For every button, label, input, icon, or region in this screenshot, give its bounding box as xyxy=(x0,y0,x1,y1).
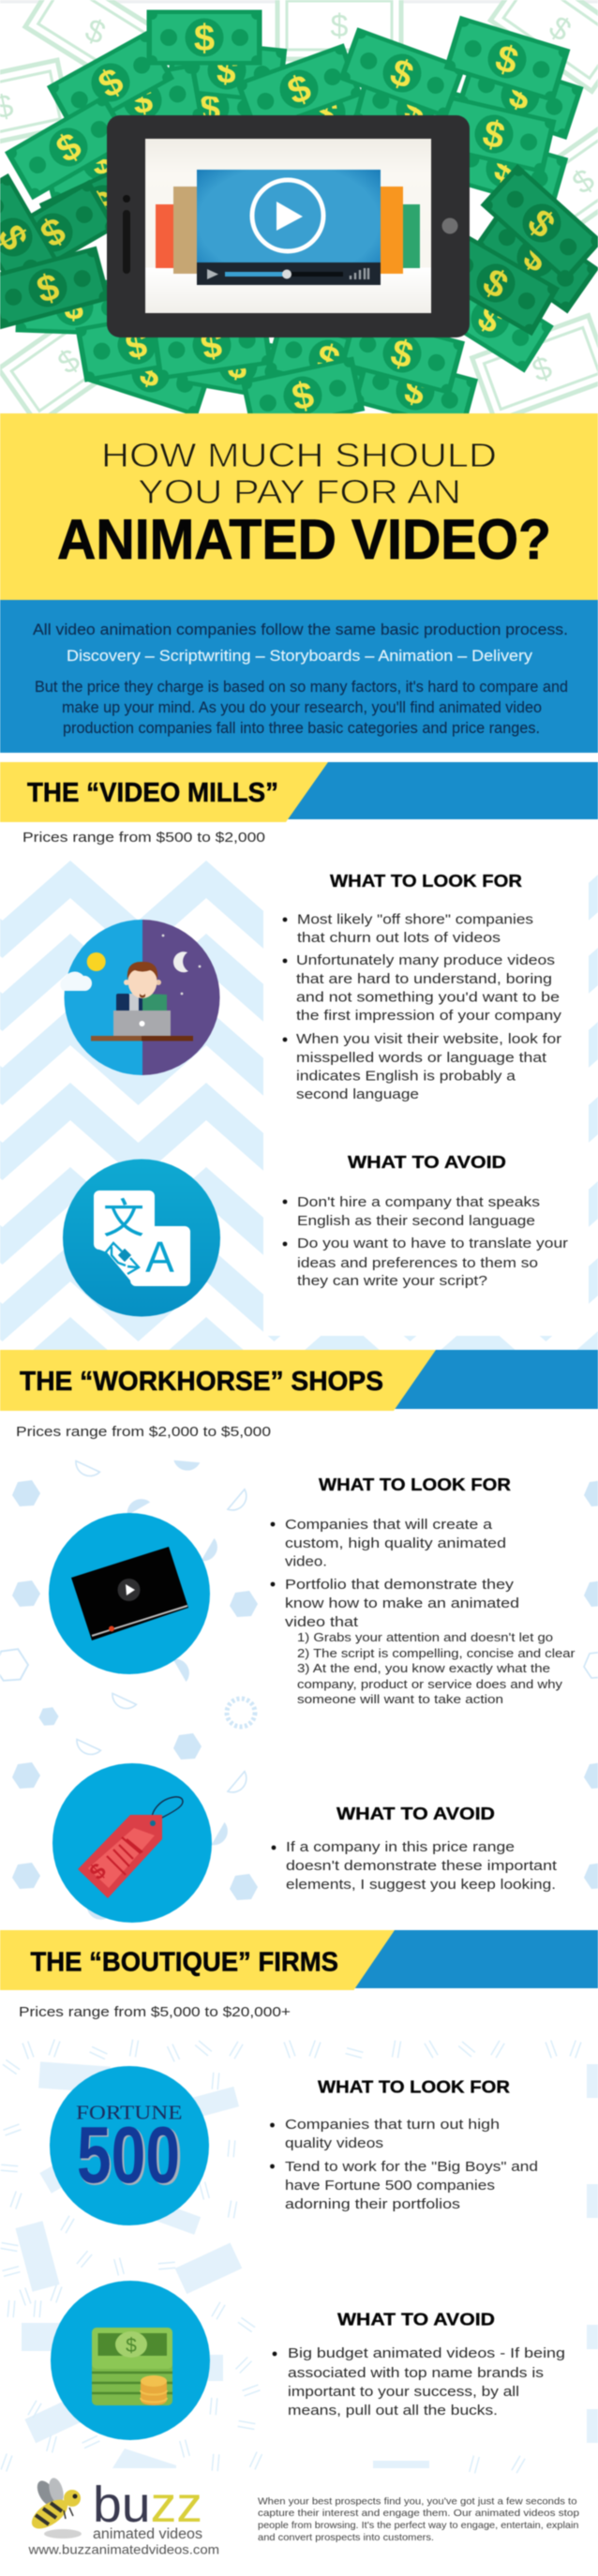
green bills behind: $ xyxy=(312,89,340,134)
what to avoid: section 1: they can write your script? xyxy=(297,1273,487,1289)
what to look for: section 2: video. xyxy=(285,1554,327,1569)
what to look for: section 1: misspelled words or language that xyxy=(296,1050,547,1066)
section 2 price range: Prices range from $2,000 to $5,000 xyxy=(16,1424,271,1440)
what to look for: section 2: video that xyxy=(285,1614,359,1630)
footer blurb: When your best prospects find you, you've got just a few seconds to xyxy=(258,2495,577,2507)
what to look for: section 2: 3) At the end, you know exactly what the xyxy=(297,1661,550,1675)
what to avoid: section 2: doesn't demonstrate these important xyxy=(286,1858,558,1874)
what to look for: section 2: know how to make an animated xyxy=(285,1595,519,1611)
green bills behind: $ xyxy=(194,18,215,59)
green bills behind: $ xyxy=(471,295,511,341)
what to avoid: section 1: ideas and preferences to them so xyxy=(297,1255,538,1271)
green bills behind: $ xyxy=(490,145,521,190)
hero illustration: tablet on pile of money xyxy=(0,0,598,435)
green bills behind: $ xyxy=(85,138,116,183)
what to look for: section 2: 1) Grabs your attention and doesn't let go xyxy=(297,1630,553,1644)
footer blurb: people from browsing. It's the perfect way to engage, entertain, explain xyxy=(258,2520,579,2531)
icon: bee xyxy=(27,2477,82,2539)
footer logo: buzz animated videos: www.buzzanimatedvideos.com xyxy=(27,2542,219,2557)
footer blurb xyxy=(258,2495,579,2543)
intro panel: production companies fall into three basic categories and price ranges. xyxy=(63,720,540,737)
section 1 chevron background xyxy=(0,853,598,1396)
green bills behind: $ xyxy=(50,125,88,171)
faded outline bills xyxy=(0,0,598,424)
green bills behind: $ xyxy=(200,88,220,129)
green bills behind: $ xyxy=(400,86,431,131)
what to look for: section 2 xyxy=(271,1475,576,1706)
section 1 header: THE “VIDEO MILLS” xyxy=(27,778,278,808)
faded outline bills: $ xyxy=(81,12,111,52)
what to look for: section 2: custom, high quality animated xyxy=(285,1535,506,1551)
icon: fortune 500: 500 xyxy=(78,2112,183,2202)
what to look for: section 1: that churn out lots of videos xyxy=(297,930,501,946)
what to look for: section 2: Companies that will create a xyxy=(285,1517,493,1533)
green bills behind: $ xyxy=(123,322,151,367)
section 3 header: THE “BOUTIQUE” FIRMS xyxy=(30,1948,338,1978)
tablet xyxy=(107,115,470,337)
green bills behind: $ xyxy=(385,51,419,97)
green bills behind: $ xyxy=(519,202,562,247)
icon: fortune 500: FORTUNE xyxy=(76,2102,182,2124)
intro panel xyxy=(0,600,598,753)
icon: translation: A xyxy=(145,1233,174,1281)
icon: translation xyxy=(63,1159,220,1316)
footer logo: buzz animated videos xyxy=(27,2477,219,2557)
intro panel: Discovery – Scriptwriting – Storyboards – Animation – Delivery xyxy=(67,648,533,665)
green bills behind: $ xyxy=(313,336,344,381)
icon: person working day and night xyxy=(60,919,221,1076)
what to look for: section 3: Companies that turn out high xyxy=(285,2117,500,2133)
green bills behind: $ xyxy=(92,60,130,107)
what to look for: section 3: adorning their portfolios xyxy=(285,2196,460,2212)
what to look for: section 3: have Fortune 500 companies xyxy=(285,2178,495,2194)
icon: price tag: $ xyxy=(84,1858,112,1885)
green bills behind: $ xyxy=(34,209,72,255)
intro panel: All video animation companies follow the same basic production process. xyxy=(33,622,568,638)
what to avoid: section 3: associated with top name brands is xyxy=(288,2365,544,2381)
what to look for: section 2: 2) The script is compelling, concise and clear xyxy=(297,1646,576,1660)
what to look for: section 3 xyxy=(270,2077,538,2212)
section 3 bars and lines background xyxy=(1,2040,598,2473)
green bills behind: $ xyxy=(224,342,252,387)
what to avoid: section 3: Big budget animated videos - If being xyxy=(288,2345,565,2361)
title band: YOU PAY FOR AN xyxy=(138,472,461,511)
green bills behind: $ xyxy=(516,234,557,280)
icon: video player xyxy=(49,1513,210,1674)
what to avoid: section 2: WHAT TO AVOID xyxy=(336,1805,495,1823)
icon: price tag xyxy=(52,1763,212,1923)
title band: HOW MUCH SHOULD xyxy=(101,436,497,474)
what to avoid: section 1 xyxy=(283,1153,568,1289)
what to look for: section 3: Tend to work for the "Big Boys" and xyxy=(285,2159,538,2175)
what to avoid: section 1: WHAT TO AVOID xyxy=(348,1153,506,1172)
what to avoid: section 1: English as their second language xyxy=(297,1213,535,1229)
icon: translation: 文 xyxy=(103,1185,144,1245)
icon: fortune 500: 500 xyxy=(77,2111,180,2200)
section 2 shape background xyxy=(0,1460,598,1922)
green bills behind: $ xyxy=(504,72,537,117)
what to look for: section 1: that are hard to understand, boring xyxy=(296,971,552,987)
what to look for: section 2: company, product or service does and why xyxy=(297,1677,563,1691)
what to look for: section 1 xyxy=(283,872,562,1102)
title band xyxy=(0,413,598,600)
what to look for: section 1: and not something you'd want to be xyxy=(296,990,560,1005)
green bills behind: $ xyxy=(400,367,431,412)
section 2 header: THE “WORKHORSE” SHOPS xyxy=(20,1367,383,1397)
section 3 header xyxy=(0,1930,598,1990)
green bills behind xyxy=(0,9,598,435)
green bills behind: $ xyxy=(289,374,318,419)
what to look for: section 1: WHAT TO LOOK FOR xyxy=(330,872,522,891)
what to avoid: section 2 xyxy=(272,1805,558,1893)
what to avoid: section 2: If a company in this price range xyxy=(286,1839,515,1855)
green bills behind: $ xyxy=(282,67,316,112)
icon: stack of cash and coins: $ xyxy=(126,2335,137,2357)
green bills behind: $ xyxy=(33,266,64,311)
green bills behind: $ xyxy=(386,332,417,377)
green bills behind: $ xyxy=(199,322,225,366)
what to avoid: section 3: WHAT TO AVOID xyxy=(337,2310,495,2329)
green bills behind: $ xyxy=(85,182,122,229)
faded outline bills: $ xyxy=(52,342,86,382)
green bills behind: $ xyxy=(491,37,523,82)
faded outline bills: $ xyxy=(528,350,557,389)
footer logo: buzz animated videos: buzz xyxy=(93,2477,202,2533)
what to look for: section 1: Most likely "off shore" companies xyxy=(297,911,533,928)
title band: ANIMATED VIDEO? xyxy=(57,508,551,571)
faded outline bills: $ xyxy=(543,9,577,49)
green bills behind: $ xyxy=(215,48,239,91)
faded outline bills: $ xyxy=(331,8,349,44)
what to look for: section 1: Unfortunately many produce videos xyxy=(296,952,555,968)
what to look for: section 2: Portfolio that demonstrate they xyxy=(285,1577,515,1593)
what to avoid: section 3: means, pull out all the bucks. xyxy=(288,2403,498,2419)
icon: stack of cash and coins xyxy=(51,2281,210,2440)
green bills behind: $ xyxy=(135,350,168,395)
green bills behind: $ xyxy=(63,285,85,326)
intro panel: But the price they charge is based on so many factors, it's hard to compare and xyxy=(35,679,568,696)
what to look for: section 1: indicates English is probably a xyxy=(296,1069,516,1084)
footer blurb: capture their interest and engage them. Our animated videos stop xyxy=(258,2508,579,2519)
what to look for: section 1: second language xyxy=(296,1086,419,1102)
section 1 price range: Prices range from $500 to $2,000 xyxy=(22,830,265,846)
section 3 price range: Prices range from $5,000 to $20,000+ xyxy=(19,2004,291,2020)
what to avoid: section 2: elements, I suggest you keep looking. xyxy=(286,1877,556,1893)
what to look for: section 2: WHAT TO LOOK FOR xyxy=(319,1475,511,1494)
what to look for: section 3: WHAT TO LOOK FOR xyxy=(318,2077,510,2096)
green bills behind: $ xyxy=(476,261,515,307)
what to look for: section 1: the first impression of your company xyxy=(296,1008,562,1024)
section 2 header xyxy=(0,1350,598,1411)
green bills behind: $ xyxy=(128,77,157,122)
footer blurb: and convert prospects into customers. xyxy=(258,2532,434,2543)
icon: fortune 500 xyxy=(50,2066,209,2225)
what to look for: section 1: When you visit their website, look for xyxy=(296,1031,561,1047)
green bills behind: $ xyxy=(479,112,509,157)
what to avoid: section 3: important to your success, by all xyxy=(288,2384,519,2400)
what to avoid: section 1: Do you want to have to translate your xyxy=(297,1236,568,1251)
what to look for: section 3: quality videos xyxy=(285,2135,383,2151)
intro panel: make up your mind. As you do your research, you'll find animated video xyxy=(62,699,542,716)
what to avoid: section 1: Don't hire a company that speaks xyxy=(297,1194,540,1210)
what to avoid: section 3 xyxy=(273,2310,565,2419)
section 1 header xyxy=(0,762,598,822)
what to look for: section 2: someone will want to take action xyxy=(297,1692,503,1706)
footer logo: buzz animated videos: animated videos xyxy=(93,2526,202,2542)
